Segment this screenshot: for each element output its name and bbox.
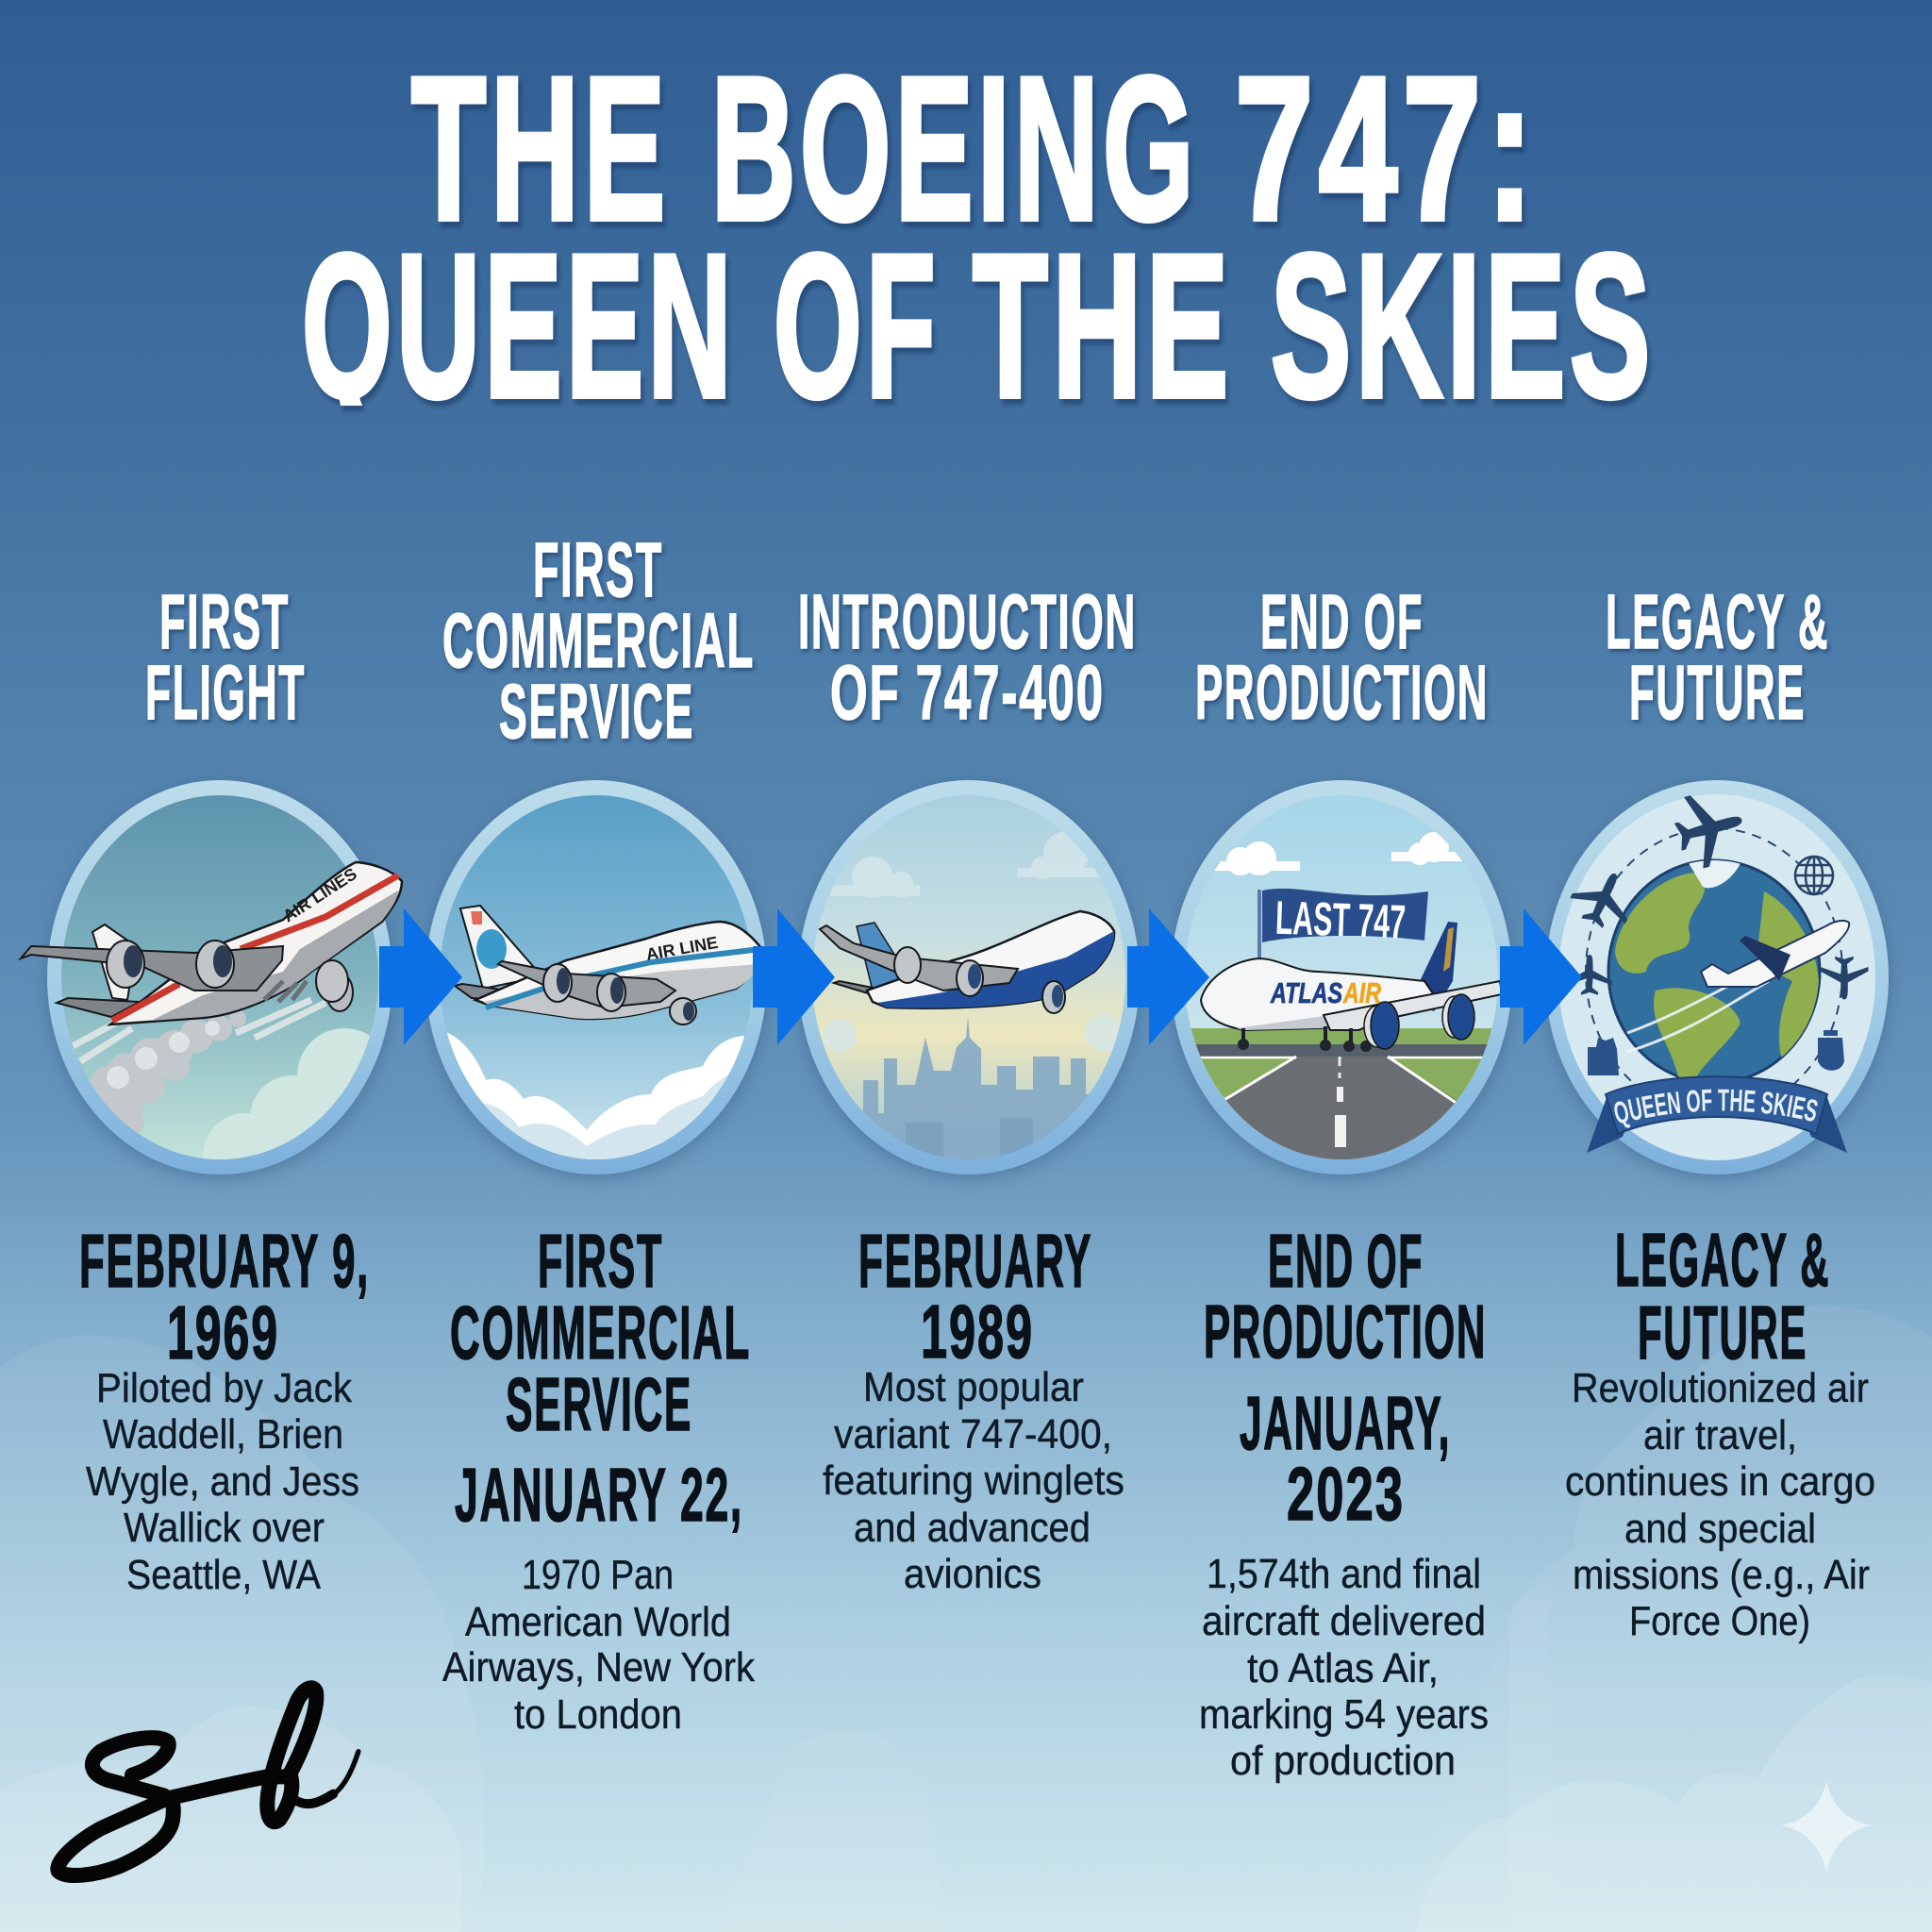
column: first commercial service: SERVICE: [506, 1362, 692, 1446]
icon: plane top: [1668, 784, 1751, 873]
body text: marking 54 years: [1199, 1691, 1489, 1738]
arrow: step two to three: [753, 908, 835, 1045]
column: legacy and future: [1565, 1218, 1875, 1644]
flight path ring: [1586, 828, 1842, 1115]
column: first commercial service: [442, 1219, 756, 1738]
body text: 1970 Pan: [522, 1552, 674, 1598]
aircraft: atlas air freighter: [1201, 922, 1502, 1052]
body text: featuring winglets: [823, 1457, 1124, 1504]
heading: introduction of 747-400: INTRODUCTION: [798, 579, 1137, 665]
heading: end of production: PRODUCTION: [1195, 650, 1489, 736]
title: QUEEN: [302, 211, 736, 440]
body text: 1,574th and final: [1207, 1551, 1481, 1597]
heading: introduction of 747-400: OF 747-400: [830, 650, 1105, 736]
banner: last 747 flag: [1259, 889, 1428, 959]
body text: Wallick over: [124, 1505, 325, 1551]
column: first commercial service: FIRST: [538, 1219, 663, 1303]
icon: wireframe globe: [1795, 857, 1833, 894]
aircraft: climbing jet over globe: [1627, 921, 1849, 1052]
aircraft: atlas air freighter: ATLAS: [1270, 976, 1342, 1009]
signature: [58, 1688, 358, 1875]
panel: first flight porthole: [17, 780, 404, 1185]
title: THE: [973, 211, 1233, 440]
body text: avionics: [904, 1551, 1041, 1597]
column: end of production: [1199, 1219, 1489, 1784]
title: BOEING: [711, 34, 1198, 262]
body text: aircraft delivered: [1202, 1598, 1486, 1644]
icon: ship: [1818, 1030, 1844, 1071]
icon: plane right: [1821, 957, 1868, 1000]
arrow: step four to five: [1500, 908, 1582, 1045]
aircraft: atlas air freighter: AIR: [1342, 976, 1381, 1009]
column: end of production: 2023: [1287, 1452, 1405, 1536]
panel: legacy and future porthole: [1544, 780, 1892, 1185]
panel: end of production porthole: [1170, 780, 1519, 1174]
heading: first commercial service: FIRST: [533, 527, 663, 613]
panel: first commercial service porthole: [425, 780, 767, 1189]
heading: first flight: FLIGHT: [145, 650, 306, 736]
column: end of production: END OF: [1268, 1219, 1424, 1303]
icon: globe: [1608, 860, 1820, 1085]
column: february 9, 1969: FEBRUARY 9,: [79, 1219, 370, 1303]
body text: Waddell, Brien: [103, 1411, 343, 1457]
aircraft: 747 prototype climbing: AIR LINES: [279, 864, 360, 925]
body text: to Atlas Air,: [1247, 1645, 1439, 1691]
body text: [1199, 1551, 1489, 1784]
body text: Wygle, and Jess: [86, 1458, 359, 1505]
body text: Airways, New York: [442, 1644, 756, 1690]
body text: and advanced: [854, 1505, 1091, 1551]
body text: Force One): [1629, 1598, 1810, 1644]
ribbon: queen of the skies: [1587, 1075, 1847, 1153]
banner: last 747 flag: LAST 747: [1274, 891, 1407, 948]
aircraft: pan am style 747: [455, 906, 761, 1024]
body text: to London: [514, 1691, 682, 1738]
city skyline: [863, 1017, 1089, 1159]
heading: end of production: END OF: [1260, 579, 1424, 665]
body text: and special: [1624, 1506, 1816, 1552]
heading: first commercial service: [442, 527, 755, 755]
column: february 1989: 1989: [921, 1290, 1034, 1374]
body text: Seattle, WA: [126, 1552, 322, 1598]
heading: first commercial service: COMMERCIAL: [442, 598, 755, 684]
title: OF: [774, 211, 940, 440]
heading: legacy and future: [1606, 579, 1829, 736]
heading: end of production: [1195, 579, 1489, 736]
arrow: step one to two: [379, 908, 462, 1045]
column: end of production: PRODUCTION: [1204, 1290, 1487, 1374]
column: first commercial service: JANUARY 22,: [455, 1453, 743, 1537]
body text: air travel,: [1643, 1412, 1797, 1458]
body text: of production: [1230, 1738, 1456, 1784]
heading: first flight: [145, 579, 306, 736]
column: february 1989: [823, 1219, 1124, 1597]
icon: control tower: [1588, 1038, 1619, 1075]
column: first commercial service: COMMERCIAL: [450, 1291, 751, 1374]
heading row: [145, 527, 1829, 755]
sparkle star: [1781, 1781, 1872, 1872]
title: [305, 74, 1651, 413]
heading: first flight: FIRST: [159, 579, 290, 665]
panel: 747-400 porthole: [798, 780, 1140, 1174]
body text: [86, 1365, 359, 1598]
icon: plane upper left: [1564, 861, 1642, 936]
column: february 9, 1969: 1969: [167, 1291, 279, 1374]
column: end of production: JANUARY,: [1240, 1381, 1451, 1465]
aircraft: 747 prototype climbing: [21, 862, 402, 1024]
aircraft: pan am style 747: AIR LINE: [644, 933, 720, 964]
icon: plane left: [1567, 955, 1612, 995]
body text: Revolutionized air: [1572, 1365, 1869, 1411]
background clouds: [0, 1305, 1932, 1932]
column: february 9, 1969: [79, 1219, 370, 1598]
ribbon: queen of the skies: QUEEN OF THE SKIES: [1614, 1089, 1818, 1128]
body text: missions (e.g., Air: [1573, 1552, 1870, 1598]
body text: continues in cargo: [1565, 1458, 1875, 1505]
title: SKIES: [1271, 211, 1655, 440]
body text: [442, 1552, 756, 1738]
column: february 1989: FEBRUARY: [858, 1219, 1092, 1303]
body text: American World: [465, 1599, 731, 1645]
body text: [823, 1364, 1124, 1597]
body text: [1565, 1365, 1875, 1644]
body text: variant 747-400,: [834, 1411, 1112, 1457]
body text: Piloted by Jack: [96, 1365, 353, 1411]
title: THE: [411, 34, 670, 262]
heading: first commercial service: SERVICE: [499, 669, 694, 755]
heading: introduction of 747-400: [798, 579, 1137, 736]
arrow: step three to four: [1127, 908, 1209, 1045]
aircraft: blue 747-400: [820, 911, 1114, 1013]
body text: Most popular: [863, 1364, 1084, 1410]
title: 747:: [1235, 34, 1539, 262]
